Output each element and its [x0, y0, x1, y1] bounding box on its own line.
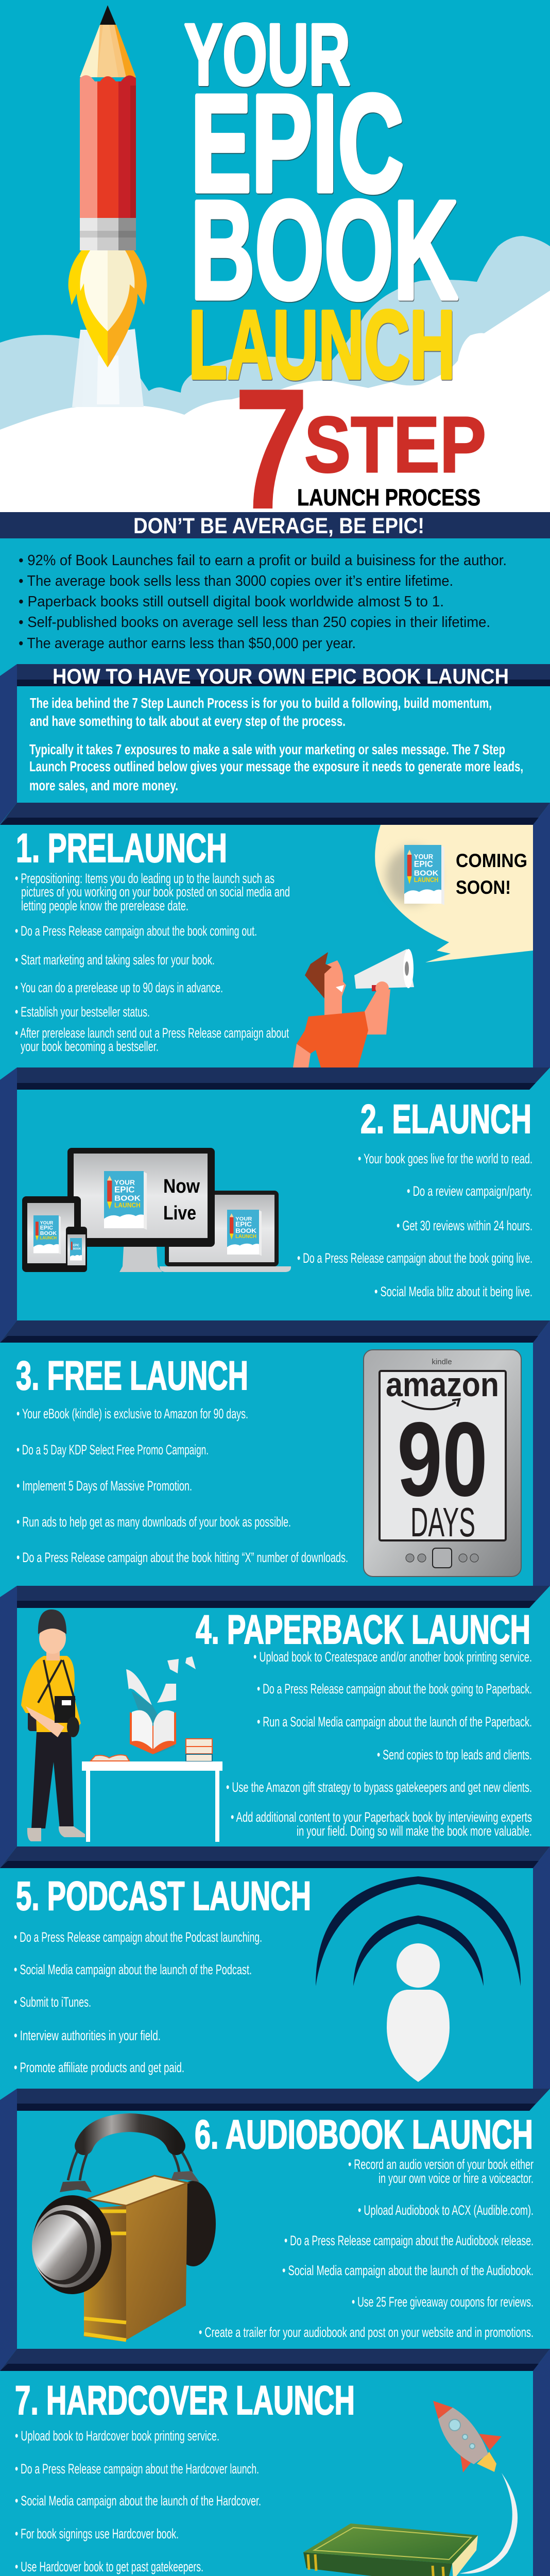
statistics list: • 92% of Book Launches fail to earn a profit or build a buisiness for the author. — [19, 552, 507, 569]
flying pages — [126, 1656, 196, 1754]
statistics list — [19, 552, 507, 652]
rocket smoke trail — [72, 330, 144, 407]
panel: how to — [0, 664, 550, 824]
coming soon text: COMING — [456, 850, 527, 871]
bullet list: • After prerelease launch send out a Press Release campaign about — [15, 1025, 289, 1041]
subtitle: 7 step — [234, 352, 486, 545]
frame band — [0, 1846, 550, 2089]
monitor — [67, 1148, 215, 1272]
coming soon text — [456, 850, 527, 898]
laptop — [160, 1191, 291, 1272]
heading: 7. HARDCOVER LAUNCH — [15, 2377, 355, 2423]
phone — [66, 1227, 87, 1272]
bullet list: • Promote affiliate products and get paid. — [14, 2060, 184, 2075]
heading: 5. PODCAST LAUNCH — [16, 1873, 311, 1919]
frame band — [0, 2089, 550, 2371]
book cover: monitor: BOOK — [114, 1194, 141, 1203]
kindle device: 90 — [397, 1400, 488, 1518]
bullet list — [16, 1406, 348, 1565]
book cover: monitor — [104, 1171, 147, 1230]
table — [82, 1761, 222, 1842]
subtitle: 7 step: 7 — [234, 352, 309, 545]
intro text — [29, 695, 523, 793]
statistics list: • The average author earns less than $50,000 per year. — [19, 635, 356, 652]
bullet list: • You can do a prerelease up to 90 days in advance. — [15, 980, 223, 995]
bullet list: • Do a Press Release campaign about the Podcast launching. — [14, 1929, 262, 1945]
now live text: Now — [163, 1176, 200, 1197]
title — [184, 6, 458, 399]
device group — [22, 1148, 291, 1272]
bullet list — [15, 871, 290, 1054]
bullet list: • Use Hardcover book to get past gatekeepers. — [15, 2559, 203, 2574]
book cover: phone — [70, 1238, 82, 1260]
kindle device: amazon — [386, 1365, 499, 1403]
headphones and book — [32, 2123, 216, 2342]
small open book — [91, 1755, 129, 1761]
book cover: coming soon — [404, 845, 444, 905]
book cover: coming soon: EPIC — [414, 859, 433, 869]
bullet list — [297, 1151, 532, 1299]
panel: 7 hardcover launch — [15, 2377, 518, 2576]
book cover: monitor: YOUR — [114, 1179, 135, 1187]
bullet list: • Start marketing and taking sales for your book. — [15, 952, 215, 968]
bullet list — [14, 1929, 262, 2075]
book cover: tablet: LAUNCH — [40, 1235, 57, 1241]
panel: 6 audiobook launch — [32, 2111, 534, 2342]
subtitle: 7 step: STEP — [304, 400, 486, 489]
statistics list: • Paperback books still outsell digital book worldwide almost 5 to 1. — [19, 594, 444, 610]
panel: 1 prelaunch — [15, 825, 533, 1067]
bullet list: • Run ads to help get as many downloads of your book as possible. — [16, 1514, 291, 1530]
coming soon text: SOON! — [456, 877, 511, 898]
book cover: tablet: YOUR — [40, 1221, 54, 1226]
book cover: laptop: BOOK — [235, 1228, 256, 1234]
frame: left side — [0, 664, 17, 824]
open book — [130, 1710, 176, 1754]
book cover: laptop: LAUNCH — [235, 1234, 256, 1240]
kindle device — [364, 1350, 521, 1577]
book cover: coming soon: YOUR — [414, 853, 434, 860]
bullet list: • Submit to iTunes. — [14, 1994, 91, 2010]
book cover: laptop: EPIC — [235, 1221, 252, 1228]
bullet list: • Your eBook (kindle) is exclusive to Amazon for 90 days. — [16, 1406, 248, 1421]
frame band — [0, 1067, 550, 1343]
bullet list: letting people know the prerelease date. — [21, 898, 188, 913]
speech bubble — [375, 825, 533, 962]
sky — [0, 0, 550, 512]
bullet list: • Do a Press Release campaign about the Hardcover launch. — [15, 2461, 259, 2477]
podcast icon — [316, 1876, 521, 2082]
book cover: tablet: BOOK — [40, 1231, 57, 1236]
bullet list — [15, 2428, 294, 2576]
bullet list: • For book signings use Hardcover book. — [15, 2526, 179, 2541]
person with megaphone — [293, 949, 414, 1067]
cloud: back layer — [0, 236, 550, 512]
hero header — [0, 0, 550, 545]
title: YOUR — [184, 6, 350, 103]
rocket trail — [459, 2473, 518, 2574]
title: EPIC — [191, 66, 404, 221]
book cover: phone: BOOK — [73, 1247, 81, 1251]
statistics list: • Self-published books on average sell less than 250 copies in their lifetime. — [19, 614, 490, 631]
bullet list: • Social Media campaign about the launch of the Podcast. — [14, 1962, 252, 1977]
panel: 4 paperback launch — [21, 1606, 532, 1842]
now live text — [163, 1176, 200, 1224]
bullet list: • Establish your bestseller status. — [15, 1004, 150, 1020]
bullet list: • Implement 5 Days of Massive Promotion. — [16, 1478, 192, 1494]
now live text: Live — [163, 1202, 196, 1224]
heading: 1. PRELAUNCH — [16, 825, 227, 871]
book cover: laptop: YOUR — [235, 1216, 252, 1222]
bullet list: pictures of you working on your book posted on social media and — [21, 884, 290, 900]
book shadow — [386, 848, 438, 904]
heading: HOW TO HAVE YOUR OWN EPIC BOOK LAUNCH — [53, 664, 509, 688]
frame: top band — [17, 664, 550, 686]
frame band — [0, 803, 550, 1067]
frame band — [0, 1586, 550, 1868]
banner: don't be average: DON’T BE AVERAGE, BE EPIC! — [133, 514, 424, 538]
bullet list: • Interview authorities in your field. — [14, 2028, 161, 2043]
book cover: coming soon: BOOK — [414, 869, 439, 877]
tablet — [22, 1196, 81, 1272]
kindle device: kindle — [432, 1358, 452, 1366]
bullet list: • Upload book to Hardcover book printing service. — [15, 2428, 219, 2444]
photographer figure — [21, 1609, 85, 1841]
panel: 3 free launch — [16, 1350, 521, 1577]
intro text: and have something to talk about at every step of the process. — [30, 713, 346, 729]
cloud: front layer — [0, 291, 550, 512]
bullet list — [199, 2157, 534, 2340]
subtitle: 7 step: LAUNCH PROCESS — [297, 484, 480, 511]
book cover: laptop — [227, 1210, 262, 1256]
frame band — [0, 2349, 550, 2576]
bullet list: • Social Media campaign about the launch of the Hardcover. — [15, 2493, 261, 2509]
bullet list: • Do a Press Release campaign about the book coming out. — [15, 923, 257, 939]
green hardcover book — [303, 2523, 478, 2576]
bullet list — [226, 1649, 532, 1839]
bullet list: your book becoming a bestseller. — [21, 1039, 159, 1054]
banner: don't be average — [0, 512, 550, 538]
statistics list: • The average book sells less than 3000 copies over it’s entire lifetime. — [19, 573, 453, 589]
book cover: tablet — [33, 1215, 61, 1254]
bullet list: • Prepositioning: Items you do leading up to the launch such as — [15, 871, 274, 886]
book cover: monitor: EPIC — [114, 1185, 135, 1194]
book cover: tablet: EPIC — [40, 1225, 53, 1231]
panel: 5 podcast launch — [14, 1873, 521, 2082]
book stack — [186, 1739, 212, 1761]
rocket — [433, 2401, 502, 2472]
bullet list: • Do a Press Release campaign about the book hitting “X” number of downloads. — [16, 1550, 348, 1565]
frame band — [0, 1320, 550, 1586]
intro text: more sales, and more money. — [29, 777, 178, 793]
book cover: coming soon: LAUNCH — [414, 876, 438, 884]
book cover: monitor: LAUNCH — [114, 1201, 141, 1209]
pencil rocket — [68, 5, 147, 367]
book cover: phone: EPIC — [73, 1244, 79, 1247]
panel: 2 elaunch — [22, 1096, 532, 1299]
heading: 3. FREE LAUNCH — [16, 1352, 248, 1398]
bullet list: • Do a 5 Day KDP Select Free Promo Campaign. — [16, 1442, 209, 1458]
kindle device: DAYS — [410, 1499, 475, 1545]
